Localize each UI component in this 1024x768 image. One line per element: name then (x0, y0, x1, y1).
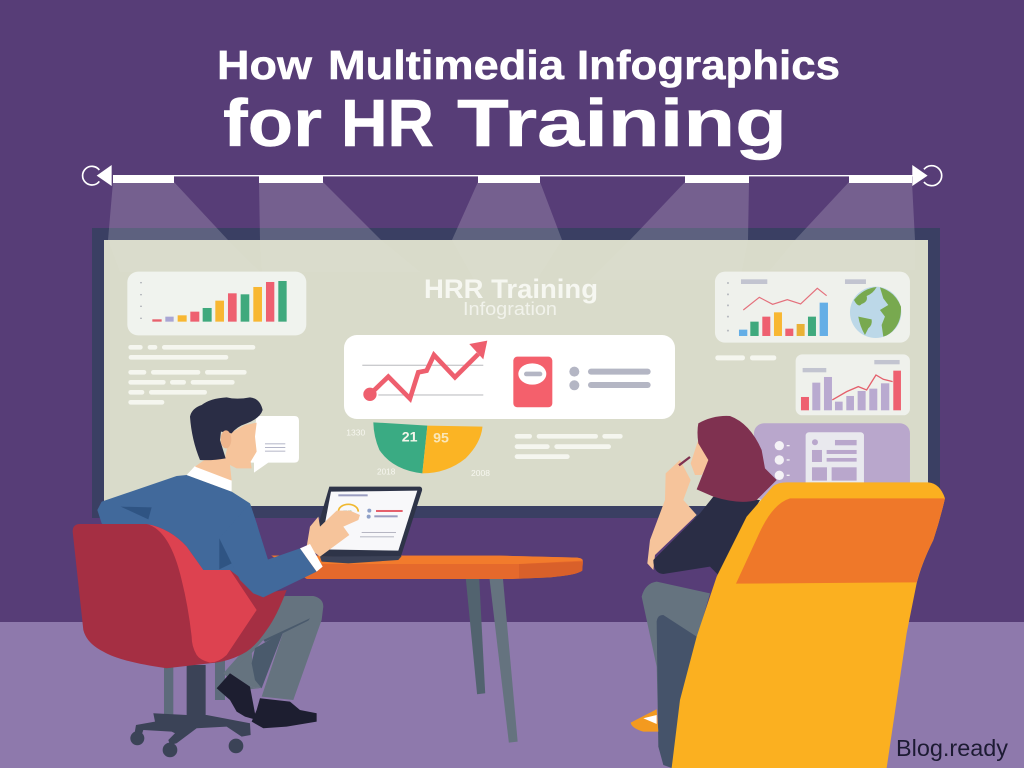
trousers (223, 596, 323, 700)
projection screen (104, 240, 928, 506)
torso (97, 475, 273, 603)
floor (0, 622, 1024, 768)
red device icon (513, 357, 552, 407)
ear (221, 430, 231, 448)
pie chart: 95 (433, 430, 449, 446)
table (271, 556, 583, 743)
screen heading (424, 274, 598, 319)
laptop gauge (338, 504, 358, 514)
pie chart: 2018 (377, 468, 396, 477)
face (691, 440, 710, 475)
screen heading: Infogration (463, 299, 557, 319)
sleeve (219, 503, 317, 597)
title: HR (341, 86, 434, 161)
panel: purple document card (754, 423, 910, 500)
yellow armchair (672, 482, 945, 768)
trousers (642, 582, 710, 768)
arm and hand (647, 460, 697, 570)
speech bubble (250, 416, 299, 473)
left text lines (128, 345, 255, 405)
trend line chart (362, 341, 487, 401)
legend rows (569, 367, 651, 390)
panel: combo chart and globe (715, 272, 910, 343)
centre text lines (515, 434, 623, 459)
shirt collar (187, 466, 232, 492)
man and chair (73, 397, 323, 757)
pie chart: 2008 (471, 469, 490, 478)
light rail (113, 175, 913, 183)
shoes (217, 673, 317, 728)
title: How (217, 42, 312, 88)
panel: left bar chart (127, 272, 306, 335)
face and neck (195, 423, 257, 481)
woman (631, 416, 777, 768)
light beams (108, 182, 915, 240)
faint beam glow on screen (108, 240, 915, 290)
pie chart (346, 422, 490, 478)
title: Infographics (577, 42, 840, 88)
icon: globe (850, 287, 901, 338)
screen heading: HRR Training (424, 274, 598, 304)
left rail handle (83, 165, 112, 186)
hair (697, 416, 777, 502)
pen (679, 457, 690, 465)
title (217, 42, 840, 161)
top (653, 497, 760, 575)
panel: central trend card (344, 335, 675, 419)
panel: lavender bar chart (796, 354, 910, 415)
chair base (130, 660, 251, 757)
screen frame (92, 228, 940, 518)
hair (190, 397, 263, 460)
hand and cuff (300, 511, 360, 572)
title: Training (457, 86, 787, 161)
laptop (318, 487, 422, 563)
title: for (223, 86, 322, 161)
short text lines (715, 355, 776, 360)
title: Multimedia (328, 42, 565, 88)
right rail handle (912, 165, 942, 186)
shoe (631, 709, 658, 732)
pie chart: 21 (402, 429, 418, 445)
pie chart: 1330 (346, 428, 366, 437)
red armchair (73, 524, 287, 668)
watermark: Blog.ready (896, 735, 1008, 761)
